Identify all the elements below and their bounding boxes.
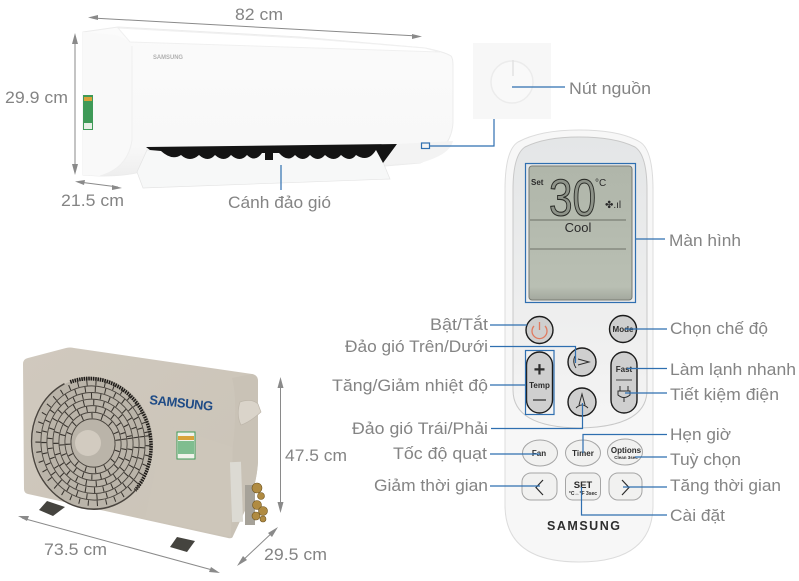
button: timer [566,440,600,466]
callout: Chọn chế độ: Chọn chế độ [670,320,768,338]
brand on remote: SAMSUNG [547,519,620,533]
callout: Màn hình [526,164,741,302]
dimension: 73.5 cm: 73.5 cm [44,541,107,559]
dimension: 47.5 cm: 47.5 cm [285,447,347,465]
button: vertical swing [568,348,596,376]
dimension: 21.5 cm [61,180,124,210]
fan hub [75,430,101,456]
callout: Hẹn giờ: Hẹn giờ [670,426,731,444]
connector from indoor power button [422,119,494,148]
callout: Tăng/Giảm nhiệt độ [332,350,554,414]
outdoor unit [23,348,268,552]
dimension: 82 cm [88,6,422,39]
callout: Nút nguồn [512,80,651,98]
dimension: 82 cm: 82 cm [235,6,283,24]
dimension: 29.5 cm [237,527,327,566]
callout: Cài đặt [582,487,725,525]
button: set [566,473,600,500]
callout: Cánh đảo gió: Cánh đảo gió [228,194,331,212]
button: left arrow [522,473,557,500]
dimension: 47.5 cm [278,377,347,513]
LCD screen: °C [595,178,606,189]
brand on outdoor unit: SAMSUNG [149,392,214,414]
callout: Giảm thời gian: Giảm thời gian [374,477,488,495]
dimension: 29.9 cm: 29.9 cm [5,89,68,107]
callout: Hẹn giờ [583,426,731,453]
air vent [146,144,397,163]
callout: Tốc độ quạt: Tốc độ quạt [393,445,487,463]
button: temp: Temp [529,381,550,390]
sensor panel [385,141,453,164]
mounting feet [39,501,195,552]
callout: Nút nguồn: Nút nguồn [569,80,651,98]
callout: Cài đặt: Cài đặt [670,507,725,525]
energy label outdoor [177,432,195,459]
air flap [137,150,390,188]
button: fan: Fan [532,449,546,458]
callout: Tăng thời gian: Tăng thời gian [670,477,781,495]
button: fan [522,440,558,466]
button: options: Clean 3sec [614,455,638,460]
valve bracket [245,485,255,525]
power button detail panel [473,43,551,119]
button: horizontal swing [568,388,596,416]
callout: Tuỳ chọn: Tuỳ chọn [670,451,741,469]
button: set: °C↔°F 3sec [569,491,597,497]
copper valves [252,483,268,522]
callout: Tăng/Giảm nhiệt độ: Tăng/Giảm nhiệt độ [332,377,488,395]
button: right arrow [609,473,642,500]
callout: Màn hình: Màn hình [669,232,741,250]
callout: Làm lạnh nhanh: Làm lạnh nhanh [670,361,796,379]
brand on indoor unit: SAMSUNG [153,54,183,61]
button: timer: Timer [572,449,594,458]
side handle [238,400,261,425]
dimension: 73.5 cm [18,516,220,573]
callout: Đảo gió Trên/Dưới: Đảo gió Trên/Dưới [345,338,488,356]
callout: Bật/Tắt [430,315,527,334]
callout: Đảo gió Trái/Phải: Đảo gió Trái/Phải [352,420,488,438]
button: mode [610,316,636,342]
dimension: 29.5 cm: 29.5 cm [264,546,327,564]
button: options: Options [611,446,642,455]
callout: Tiết kiệm điện: Tiết kiệm điện [670,386,779,404]
callout: Đảo gió Trên/Dưới [345,338,576,363]
indoor unit [83,27,453,188]
LCD screen: ✤.ıl [605,200,621,211]
energy label [83,95,93,130]
LCD screen: Set [531,178,544,187]
button: fast / energy saving: Fast [616,365,633,374]
button: temp [526,352,552,413]
fan grill [23,368,165,517]
callout: Cánh đảo gió [228,165,331,212]
button: set: SET [574,480,592,491]
button: fast / energy saving [611,352,637,413]
button: options [608,439,642,465]
dimension: 29.9 cm [5,33,78,175]
remote control [505,130,653,562]
button: temp: + [534,359,545,381]
callout: Bật/Tắt: Bật/Tắt [430,315,488,334]
button: mode: Mode [613,325,634,334]
callout: Đảo gió Trái/Phải [352,403,582,438]
button: power [526,316,553,344]
LCD screen: 30 [549,170,596,228]
LCD screen [529,166,632,300]
rating plate [230,462,243,522]
callout: Tuỳ chọn [635,451,741,469]
LCD screen: Cool [565,220,591,235]
dimension: 21.5 cm: 21.5 cm [61,192,124,210]
